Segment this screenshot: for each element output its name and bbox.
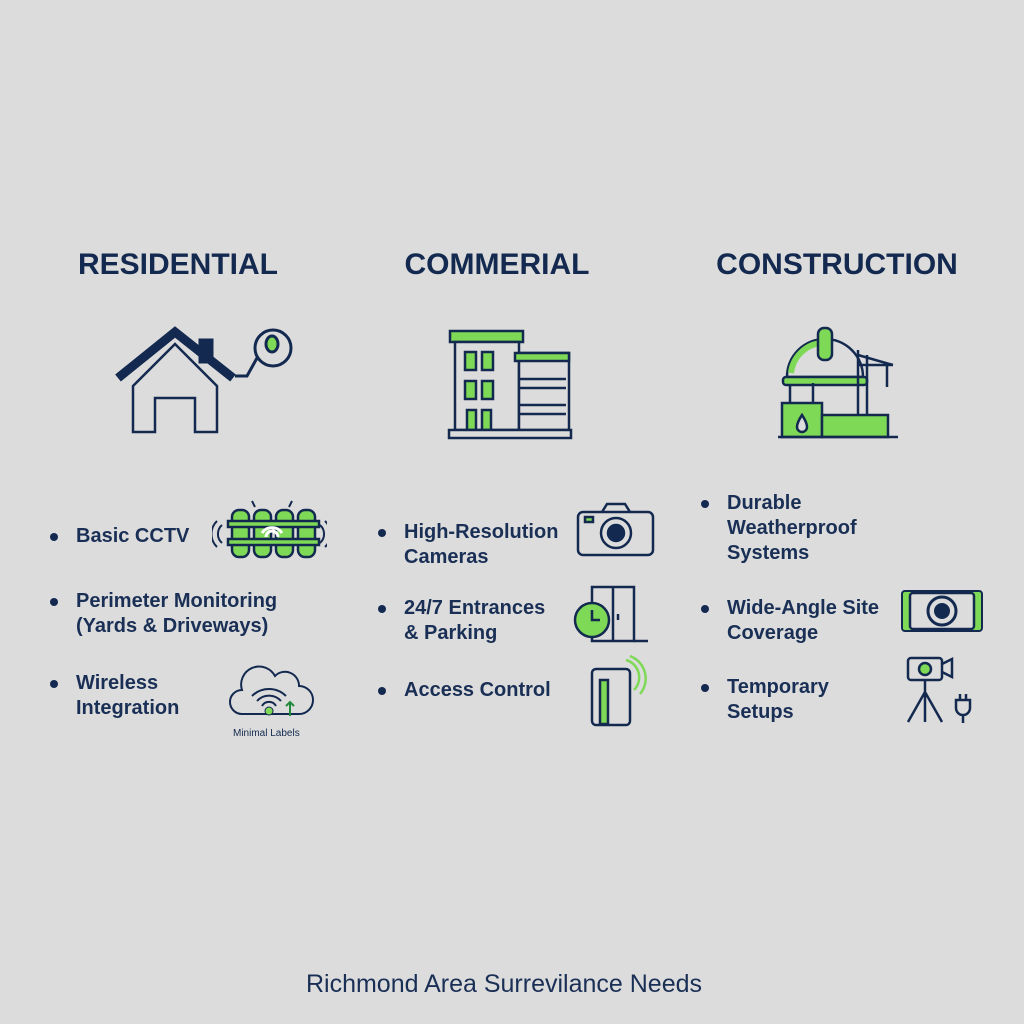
bullet: perimeter monitoring <box>76 589 277 639</box>
icon: wide-angle camera <box>901 590 983 632</box>
bullet: basic cctv: Basic CCTV <box>76 525 189 547</box>
bullet: wide-angle coverage <box>727 596 879 646</box>
icon: fence <box>212 500 327 558</box>
bullet: high-resolution cameras: Cameras <box>404 546 489 568</box>
bullet: high-resolution cameras: High-Resolution <box>404 521 558 543</box>
bullet: perimeter monitoring: Perimeter Monitoring <box>76 590 277 612</box>
bullet: durable weatherproof <box>727 491 857 566</box>
icon: house <box>115 326 292 434</box>
icon: clock door <box>574 586 648 642</box>
construction bullets <box>701 492 983 723</box>
bullet: temporary setups <box>727 675 829 725</box>
caption: minimal labels: Minimal Labels <box>233 728 300 739</box>
bullet: temporary setups: Temporary <box>727 676 829 698</box>
bullet: temporary setups: Setups <box>727 701 794 723</box>
bullet: durable weatherproof: Durable <box>727 492 801 514</box>
heading: commercial: COMMERIAL <box>404 248 589 281</box>
icon: camera <box>576 502 654 556</box>
icon: construction helmet and crane <box>778 326 898 438</box>
bullet: wide-angle coverage: Coverage <box>727 622 818 644</box>
heading: construction: CONSTRUCTION <box>716 248 958 281</box>
bullet: 24/7 entrances: 24/7 Entrances <box>404 597 545 619</box>
bullet: perimeter monitoring: (Yards & Driveways) <box>76 615 268 637</box>
bullet: access control: Access Control <box>404 679 551 701</box>
commercial bullets <box>378 502 654 726</box>
bullet: 24/7 entrances: & Parking <box>404 622 497 644</box>
icon: cloud wifi <box>229 666 314 716</box>
footer title: Richmond Area Surrevilance Needs <box>306 970 702 998</box>
bullet: durable weatherproof: Weatherproof <box>727 517 857 539</box>
bullet: wireless integration: Wireless <box>76 672 158 694</box>
icon: office building <box>448 330 572 440</box>
bullet: wireless integration <box>76 671 179 721</box>
bullet: durable weatherproof: Systems <box>727 542 809 564</box>
bullet: high-resolution cameras <box>404 520 558 570</box>
icon: tripod camera <box>906 656 972 723</box>
heading: residential: RESIDENTIAL <box>78 248 278 281</box>
residential bullets <box>50 500 327 739</box>
icon: card reader <box>590 655 647 726</box>
bullet: 24/7 entrances <box>404 596 545 646</box>
bullet: wireless integration: Integration <box>76 697 179 719</box>
bullet: wide-angle coverage: Wide-Angle Site <box>727 597 879 619</box>
